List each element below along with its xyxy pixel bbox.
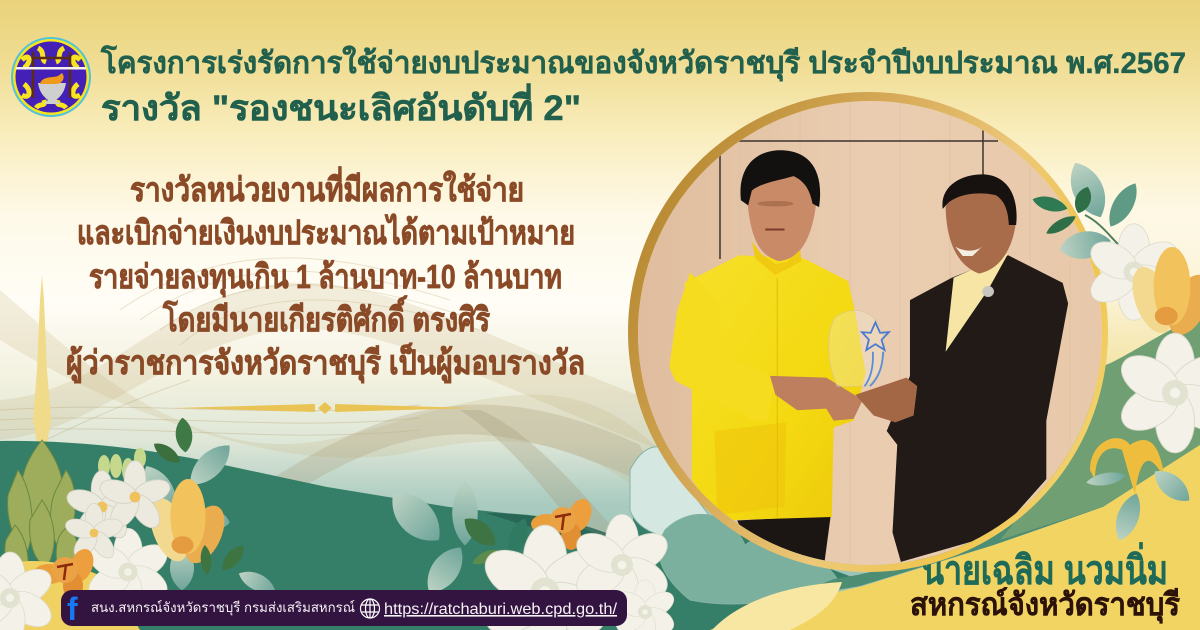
icon: globe <box>360 599 380 618</box>
website url: https://ratchaburi.web.cpd.go.th/ <box>384 601 618 618</box>
person: man in black suit <box>855 174 1068 562</box>
flowers lower centre <box>381 480 678 630</box>
award description: รายจ่ายลงทุนเกิน 1 ล้านบาท-10 ล้านบาท <box>89 258 562 298</box>
olive leaf motif <box>5 440 78 585</box>
award description: รางวัลหน่วยงานที่มีผลการใช้จ่าย <box>130 166 524 208</box>
title line 2: รางวัล "รองชนะเลิศอันดับที่ 2" <box>101 83 581 128</box>
award description: ผู้ว่าราชการจังหวัดราชบุรี เป็นผู้มอบรางวัล <box>66 342 585 384</box>
darker band centre right <box>485 513 640 552</box>
yellow corner lower left <box>0 561 140 630</box>
decorative wave ribbons <box>0 258 680 560</box>
flowers right <box>1031 156 1200 544</box>
award description <box>66 166 585 384</box>
award description: โดยมีนายเกียรติศักดิ์ ตรงศิริ <box>162 295 490 338</box>
right green leaf area <box>780 314 1200 600</box>
green region beneath frame <box>630 470 860 630</box>
person: man in yellow <box>669 150 866 562</box>
footer contact bar <box>61 590 627 627</box>
trophy <box>829 310 889 386</box>
faded lotus motif <box>630 447 838 604</box>
name title: สหกรณ์จังหวัดราชบุรี <box>910 587 1180 624</box>
gold ring frame <box>628 92 1108 572</box>
flowers lower left <box>0 417 279 630</box>
green hill lower left <box>0 441 660 630</box>
title line 1: โครงการเร่งรัดการใช้จ่ายงบประมาณของจังหวัดราชบุรี ประจำปีงบประมาณ พ.ศ.2567 <box>100 44 1186 82</box>
pale yellow lotus bottom <box>712 582 842 630</box>
bottom right yellow area <box>710 445 1200 630</box>
gold ornament divider <box>175 402 475 414</box>
office name: สนง.สหกรณ์จังหวัดราชบุรี กรมส่งเสริมสหกรณ์ <box>91 599 355 616</box>
icon: facebook: f <box>67 591 78 627</box>
photo: award handover <box>630 95 1110 575</box>
award description: และเบิกจ่ายเงินงบประมาณได้ตามเป้าหมาย <box>77 213 575 251</box>
pale yellow right side <box>1090 200 1200 400</box>
logo <box>11 37 91 117</box>
spire ornament <box>33 275 51 450</box>
